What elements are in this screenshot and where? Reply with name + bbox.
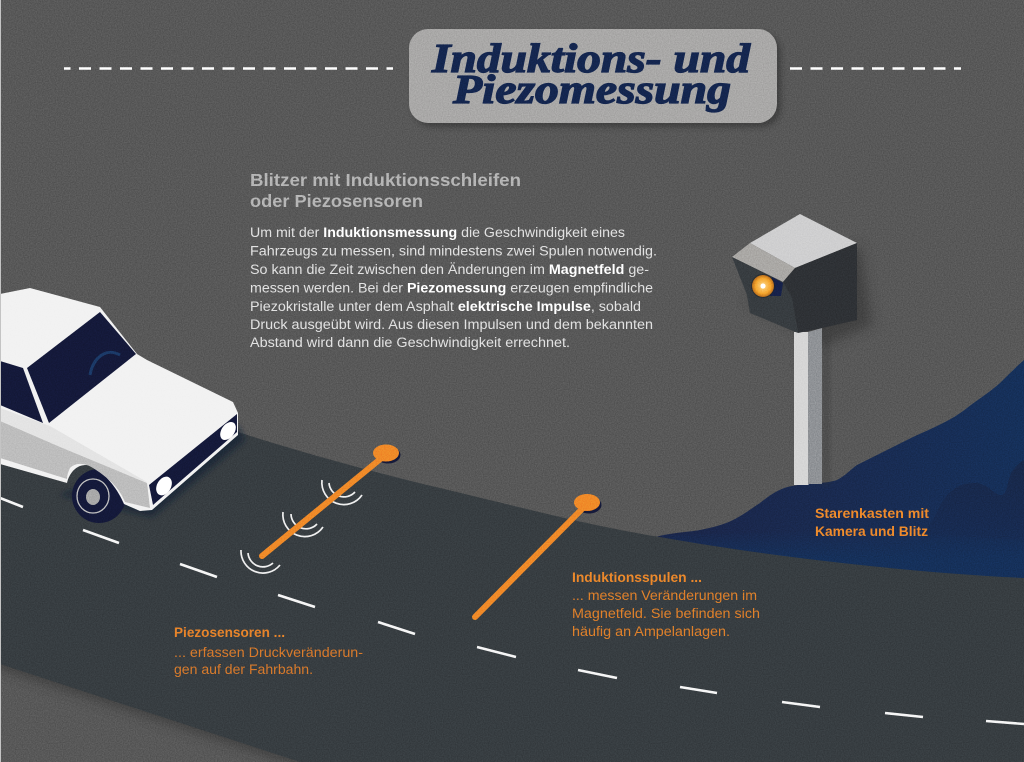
heading: Blitzer: oder Piezosensoren (250, 191, 423, 211)
title: Induktions- und (431, 35, 751, 81)
body text: Piezokristalle unter dem Asphalt elektrische Impulse, sobald (250, 299, 641, 315)
induction sensor (475, 494, 602, 617)
road shadow (0, 658, 310, 762)
sensor waves (241, 480, 362, 573)
label: Starenkasten (815, 505, 929, 539)
label: Piezosensoren (174, 625, 363, 678)
grille (149, 414, 237, 505)
body text: Abstand wird dann die Geschwindigkeit errechnet. (250, 335, 570, 351)
camera housing (732, 214, 857, 333)
windshield reflection (90, 352, 120, 375)
label: Induktionsspulen (572, 570, 760, 640)
label: Piezosensoren: Piezosensoren ... (174, 625, 285, 641)
speed camera (732, 214, 872, 485)
body text: messen werden. Bei der Piezomessung erzeugen empfindliche (250, 280, 653, 296)
hills (655, 360, 1024, 590)
body text: Druck ausgeübt wird. Aus diesen Impulsen und dem bekannten (250, 317, 653, 333)
body text: Fahrzeugs zu messen, sind mindestens zwei Spulen notwendig. (250, 244, 657, 260)
label: Induktionsspulen: ... messen Veränderungen im (572, 588, 757, 604)
label: Starenkasten: Starenkasten mit (815, 505, 929, 521)
car body (0, 288, 238, 511)
title (409, 29, 781, 127)
label: Piezosensoren: ... erfassen Druckveränderun- (174, 645, 363, 661)
body text: So kann die Zeit zwischen den Änderungen im Magnetfeld ge- (250, 261, 649, 278)
windshield (27, 312, 136, 423)
side window (0, 361, 43, 423)
header dashed line right (790, 67, 961, 70)
lens (770, 277, 783, 296)
header dashed line left (64, 67, 393, 70)
heading: Blitzer: Blitzer mit Induktionsschleifen (250, 170, 521, 190)
wheel (72, 469, 126, 523)
road markings (0, 498, 1024, 724)
label: Induktionsspulen: Induktionsspulen ... (572, 570, 702, 586)
headlight right (217, 419, 239, 443)
heading: Blitzer (250, 170, 521, 211)
road (0, 430, 1024, 762)
flash (751, 274, 775, 298)
body text: Um mit der Induktionsmessung die Geschwindigkeit eines (250, 225, 625, 241)
door strip (0, 408, 147, 482)
pole (794, 328, 822, 485)
headlight left (153, 474, 175, 498)
label: Induktionsspulen: häufig an Ampelanlagen. (572, 624, 730, 640)
side panel (0, 421, 150, 508)
title: Piezomessung (452, 66, 731, 112)
label: Induktionsspulen: Magnetfeld. Sie befinden sich (572, 606, 760, 622)
car (0, 288, 245, 523)
label: Starenkasten: Kamera und Blitz (815, 523, 928, 539)
label: Piezosensoren: gen auf der Fahrbahn. (174, 662, 313, 678)
body text (250, 225, 657, 351)
piezo sensor (262, 444, 400, 556)
